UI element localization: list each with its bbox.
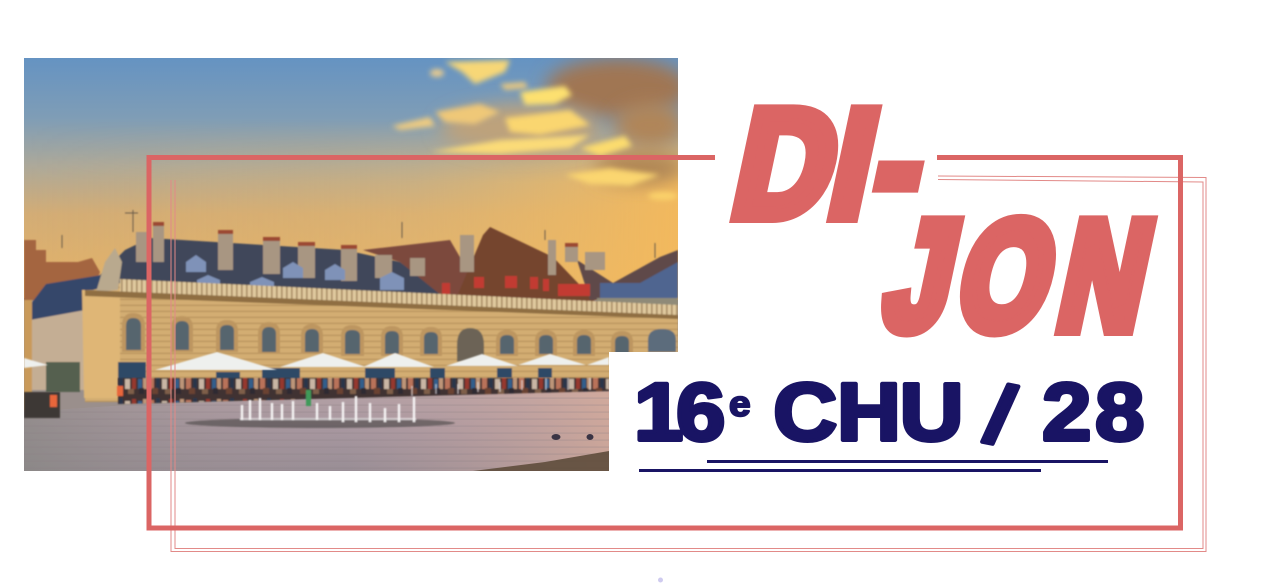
arch surrounds	[122, 313, 633, 356]
right roofs	[577, 250, 678, 300]
dormers	[186, 255, 404, 290]
parasols	[24, 352, 609, 370]
back brown roof	[363, 239, 468, 296]
subtitle: 16e CHU / 28: e	[729, 383, 751, 424]
balustrade	[120, 279, 678, 316]
subtitle: 16e CHU / 28: 16	[634, 367, 725, 458]
fountain water	[185, 378, 590, 428]
corner pavilion	[82, 290, 120, 398]
title: JON: JON	[873, 191, 1165, 360]
left townhouses	[24, 240, 100, 300]
antennas	[62, 210, 655, 258]
photo: Place de la Libération, Dijon	[24, 58, 690, 472]
wet paving corner	[473, 451, 609, 471]
slate roof	[100, 237, 440, 295]
sunset clouds	[392, 58, 690, 200]
thin double offset frame	[171, 176, 1206, 552]
chimneys	[136, 224, 605, 281]
shop fronts	[117, 361, 553, 385]
pigeons	[552, 434, 594, 440]
white title box corner	[609, 352, 679, 472]
underline: upper	[707, 460, 1108, 463]
main brown roof	[455, 227, 597, 303]
arched windows	[126, 318, 629, 354]
ground	[24, 388, 609, 471]
photo base	[24, 298, 678, 412]
buildings	[24, 210, 678, 410]
facade	[85, 283, 678, 402]
dark arch	[457, 328, 484, 362]
sky	[24, 58, 678, 300]
red dormer windows	[442, 276, 590, 296]
underline: lower	[639, 469, 1041, 472]
main coral frame	[149, 158, 1180, 528]
terrace crowd	[24, 378, 609, 418]
small lilac dot	[658, 578, 663, 582]
statue	[96, 248, 122, 292]
title: DI-: DI-	[721, 79, 941, 249]
subtitle: 16e CHU / 28: CHU / 28	[756, 367, 1144, 463]
